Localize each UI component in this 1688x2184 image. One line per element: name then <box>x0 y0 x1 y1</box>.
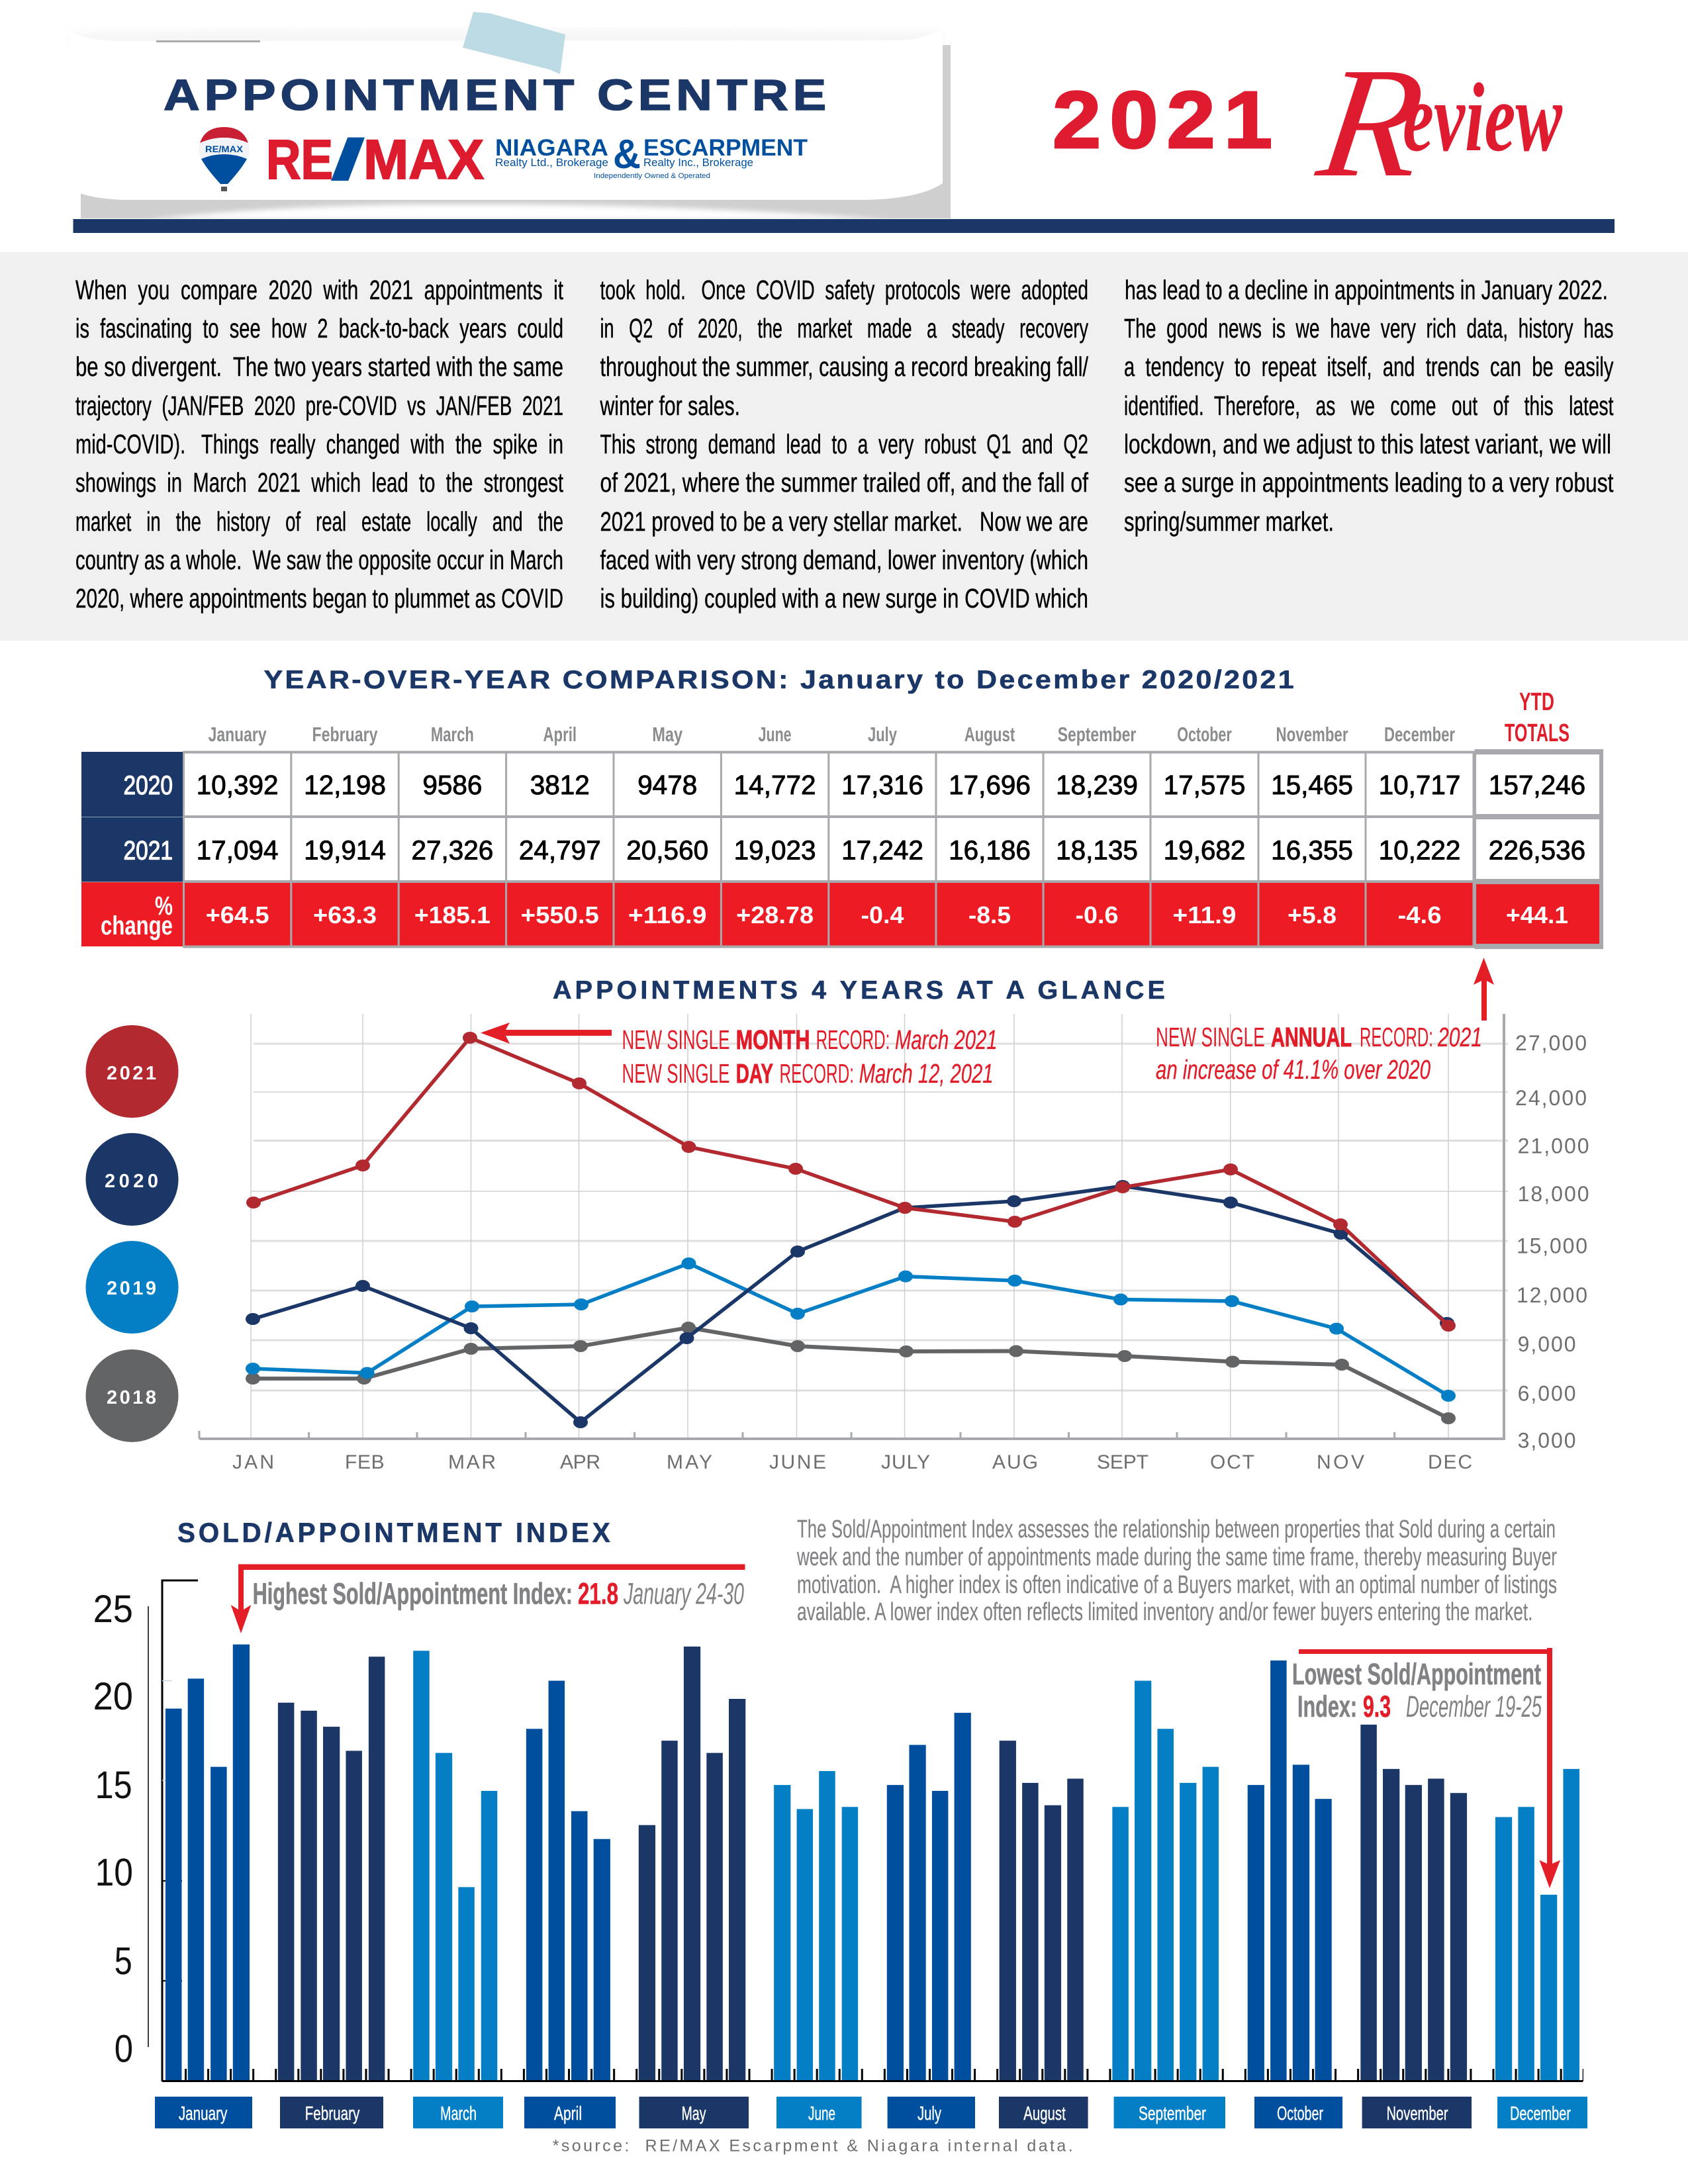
chart grid <box>251 1014 1508 1437</box>
text column 1: 2020, where appointments began to plummet as COVID <box>75 583 563 614</box>
row: 2021 values: 18,135 <box>1056 835 1138 866</box>
callout: annual record: an increase of 41.1% over 2020 <box>1156 1054 1430 1085</box>
text column 1: be so divergent. The two years started with the same <box>75 351 563 382</box>
month headers: May <box>652 723 683 746</box>
row: 2020 values: 14,772 <box>734 770 816 800</box>
row: 2020 values: 17,696 <box>949 770 1031 800</box>
row: 2021 values: 19,682 <box>1164 835 1245 866</box>
row labels: 2021 <box>123 837 173 866</box>
row: 2020 values: 9478 <box>637 770 697 800</box>
paper card <box>70 28 943 200</box>
label: August <box>999 2097 1088 2128</box>
text column 1 <box>75 275 563 614</box>
panel: intro text <box>0 252 1688 641</box>
bars: February <box>278 1657 385 2081</box>
red row <box>184 882 1475 946</box>
row label backgrounds <box>81 752 184 817</box>
legend 2018 <box>86 1349 179 1442</box>
row: 2021 values: 19,914 <box>304 835 386 866</box>
logo wordmark: RE/MAX: MAX <box>363 128 484 191</box>
row: percent change: -8.5 <box>968 901 1011 929</box>
text column 2: is building) coupled with a new surge in COVID which <box>600 583 1088 614</box>
legend 2021 <box>86 1025 179 1118</box>
callout: lowest index: Index: <box>1297 1690 1357 1723</box>
row: 2020 values: 10,717 <box>1379 770 1460 800</box>
label: June: June <box>808 2103 835 2124</box>
row: 2021 values: 20,560 <box>626 835 708 866</box>
callout: single month and day records: DAY <box>736 1058 773 1089</box>
heading: 2021 Review <box>1053 35 1563 210</box>
row: 2021 values: 10,222 <box>1379 835 1460 866</box>
row: percent change: +185.1 <box>414 901 491 929</box>
label: January <box>155 2097 252 2128</box>
y axis labels: 18,000 <box>1518 1182 1589 1206</box>
x axis labels: FEB <box>345 1451 385 1473</box>
text column 2: took hold. Once COVID safety protocols were adopted <box>600 275 1088 305</box>
icon: balloon logo: RE/MAX <box>205 144 244 154</box>
tape <box>463 12 565 74</box>
label: May <box>639 2097 749 2128</box>
row: 2021 values: 17,242 <box>841 835 923 866</box>
logo wordmark: RE/MAX: RE <box>266 128 333 191</box>
callout: single month and day records: NEW SINGLE <box>622 1058 729 1089</box>
x axis labels: MAR <box>448 1451 496 1473</box>
label: February: February <box>305 2103 360 2124</box>
bar chart: sold/appointment index <box>93 1580 1583 2081</box>
callout: lowest index: Lowest Sold/Appointment <box>1292 1657 1541 1691</box>
callout: lowest index: December 19-25 <box>1406 1690 1542 1723</box>
month headers: March <box>431 723 474 746</box>
series 2021 <box>246 1032 1456 1332</box>
label: November: November <box>1386 2103 1448 2124</box>
x axis labels: DEC <box>1428 1451 1472 1473</box>
callout: single month and day records: March 2021 <box>895 1024 998 1055</box>
text column 1: trajectory (JAN/FEB 2020 pre-COVID vs JAN/FEB 2021 <box>75 390 563 421</box>
y axis labels: 21,000 <box>1518 1134 1589 1158</box>
text column 1: country as a whole. We saw the opposite occur in March <box>75 545 563 575</box>
label: June <box>776 2097 862 2128</box>
callout: highest index: Highest Sold/Appointment Index: <box>253 1576 573 1611</box>
label: December <box>1497 2097 1587 2128</box>
month headers: June <box>759 723 792 746</box>
logo: brokerage names: NIAGARA <box>495 135 608 161</box>
month headers: December <box>1384 723 1455 746</box>
YTD box <box>1475 749 1603 949</box>
heading: year-over-year comparison: YEAR-OVER-YEAR COMPARISON: January to December 2020/2021 <box>263 666 1296 694</box>
text column 1: market in the history of real estate locally and the <box>75 506 563 537</box>
row: percent change: +64.5 <box>206 901 269 929</box>
callout: single month and day records: MONTH <box>736 1024 810 1055</box>
y axis labels: 3,000 <box>1518 1428 1576 1452</box>
heading: 2021 Review: eview <box>1403 64 1563 172</box>
month headers <box>209 723 1455 746</box>
y axis labels: 12,000 <box>1517 1283 1587 1307</box>
text column 2: in Q2 of 2020, the market made a steady recovery <box>600 313 1088 343</box>
title: appointment centre: APPOINTMENT CENTRE <box>164 70 831 119</box>
heading: appointments 4 years at a glance: APPOINTMENTS 4 YEARS AT A GLANCE <box>553 976 1168 1005</box>
label: November <box>1362 2097 1472 2128</box>
bars: December <box>1495 1769 1579 2081</box>
text column 1: When you compare 2020 with 2021 appointments it <box>75 275 563 305</box>
row: 2021 values: 24,797 <box>519 835 601 866</box>
row: 2020 values: 12,198 <box>304 770 386 800</box>
month headers: November <box>1276 723 1348 746</box>
label: July: July <box>917 2103 941 2124</box>
x axis labels: JULY <box>881 1451 930 1473</box>
legend 2018: 2018 <box>107 1387 156 1408</box>
callout: single month and day records: March 12, 2021 <box>859 1058 993 1089</box>
bars right half <box>887 1661 1579 2081</box>
YTD totals heading: TOTALS <box>1505 719 1570 747</box>
row: 2020 values: 18,239 <box>1056 770 1138 800</box>
legend 2021: 2021 <box>107 1063 156 1084</box>
bar chart y axis: 5 <box>115 1940 132 1983</box>
text column 3 <box>1124 275 1614 537</box>
bar chart x axis <box>162 2075 1583 2081</box>
row: percent change: +11.9 <box>1173 901 1237 929</box>
text column 2: of 2021, where the summer trailed off, and the fall of <box>600 467 1088 498</box>
label: May: May <box>682 2103 706 2124</box>
label: September <box>1114 2097 1225 2128</box>
text column 2: faced with very strong demand, lower inventory (which <box>600 545 1088 575</box>
text column 1: showings in March 2021 which lead to the strongest <box>75 467 563 498</box>
bar chart y axis: 25 <box>93 1588 133 1631</box>
text block: index description <box>796 1516 1557 1626</box>
row: percent change: +5.8 <box>1288 901 1336 929</box>
logo: brokerage names: ESCARPMENT <box>643 135 808 161</box>
bar chart y axis <box>93 1580 198 2081</box>
logo: brokerage names: Independently Owned & Operated <box>594 172 710 180</box>
row: 2021 values: 16,186 <box>949 835 1031 866</box>
logo: brokerage names: Realty Ltd., Brokerage <box>495 156 608 169</box>
row: 2021 values: 27,326 <box>411 835 493 866</box>
bar chart y axis: 15 <box>95 1764 132 1807</box>
label: February <box>280 2097 383 2128</box>
row labels <box>101 771 173 940</box>
row: 2020 values <box>197 770 1585 800</box>
label: January: January <box>179 2103 228 2124</box>
callout: annual record <box>1156 1022 1482 1085</box>
legend 2020 <box>86 1133 179 1226</box>
row: 2020 values: 157,246 <box>1489 770 1585 800</box>
x axis labels: JAN <box>232 1451 274 1473</box>
x axis labels: JUNE <box>769 1451 826 1473</box>
x axis labels: NOV <box>1317 1451 1364 1473</box>
callout: single month and day records <box>622 1024 998 1089</box>
month headers: September <box>1058 723 1136 746</box>
label: March: March <box>440 2103 477 2124</box>
row: percent change: -4.6 <box>1398 901 1442 929</box>
row: percent change: +44.1 <box>1506 901 1568 929</box>
callout: annual record: 2021 <box>1437 1022 1482 1052</box>
callout: single month and day records: RECORD: <box>816 1024 890 1055</box>
row: 2021 values: 226,536 <box>1489 835 1585 866</box>
text column 2: throughout the summer, causing a record breaking fall/ <box>600 351 1088 382</box>
bar chart y axis: 10 <box>95 1851 133 1894</box>
logo wordmark: RE/MAX: / <box>332 128 363 191</box>
source note: *source: RE/MAX Escarpment & Niagara internal data. <box>553 2136 1073 2155</box>
series 2020 <box>246 1180 1454 1428</box>
text column 2 <box>600 275 1088 614</box>
legend 2019: 2019 <box>107 1278 156 1299</box>
y axis labels: 15,000 <box>1517 1234 1587 1258</box>
callout: highest index: 21.8 <box>578 1576 618 1611</box>
row: 2021 values <box>197 835 1585 866</box>
label: April <box>524 2097 616 2128</box>
bars: January <box>165 1645 250 2081</box>
header: torn paper card with logo <box>70 12 951 220</box>
row labels: change <box>101 911 173 940</box>
callout: annual record: ANNUAL <box>1271 1022 1352 1052</box>
logo: brokerage names <box>495 132 808 180</box>
table: year over year <box>81 688 1603 949</box>
line chart: appointments <box>199 1014 1589 1473</box>
row: 2021 values: 16,355 <box>1271 835 1353 866</box>
bars: October <box>1248 1661 1332 2081</box>
month labels <box>155 2097 1587 2128</box>
text column 2: This strong demand lead to a very robust Q1 and Q2 <box>600 429 1088 459</box>
month headers: April <box>543 723 577 746</box>
row: 2020 values: 10,392 <box>197 770 279 800</box>
text column 2: winter for sales. <box>600 390 740 421</box>
label: October: October <box>1277 2103 1323 2124</box>
row: 2020 values: 15,465 <box>1271 770 1353 800</box>
bars: May <box>639 1647 745 2081</box>
x axis labels: APR <box>560 1451 600 1473</box>
bar chart y axis: 0 <box>115 2027 133 2070</box>
bars: July <box>887 1713 971 2081</box>
row: 2020 values: 17,575 <box>1164 770 1245 800</box>
text column 2: 2021 proved to be a very stellar market. Now we are <box>600 506 1088 537</box>
table grid <box>183 751 1474 948</box>
heading: 2021 Review: R <box>1309 35 1434 210</box>
label: July <box>888 2097 975 2128</box>
label: December: December <box>1510 2103 1571 2124</box>
label: September: September <box>1139 2103 1206 2124</box>
y axis labels: 24,000 <box>1515 1086 1587 1110</box>
month headers: July <box>868 723 898 746</box>
callout: single month and day records: NEW SINGLE <box>622 1024 729 1055</box>
row: percent change: +63.3 <box>313 901 377 929</box>
row: percent change: -0.4 <box>861 901 904 929</box>
logo: brokerage names: Realty Inc., Brokerage <box>643 156 753 169</box>
row: percent change: +116.9 <box>628 901 707 929</box>
row: 2021 values: 17,094 <box>197 835 279 866</box>
heading: 2021 Review: 2021 <box>1053 75 1281 165</box>
row: percent change: -0.6 <box>1075 901 1119 929</box>
callout: lowest index <box>1292 1648 1560 1888</box>
x axis labels <box>232 1451 1472 1473</box>
label: August: August <box>1023 2103 1066 2124</box>
YTD totals heading: YTD <box>1519 688 1554 716</box>
month headers: October <box>1177 723 1232 746</box>
row: 2021 values: 19,023 <box>734 835 816 866</box>
series 2018 <box>246 1322 1456 1424</box>
x axis labels: MAY <box>667 1451 712 1473</box>
row: percent change: +550.5 <box>521 901 599 929</box>
text column 3: spring/summer market. <box>1124 506 1334 537</box>
bars left half <box>165 1645 858 2081</box>
x axis labels: OCT <box>1210 1451 1254 1473</box>
y axis labels: 27,000 <box>1515 1031 1587 1055</box>
callout: annual record: RECORD: <box>1360 1022 1433 1052</box>
row labels: % <box>155 891 173 921</box>
series 2019 <box>246 1257 1456 1402</box>
legend 2020: 2020 <box>105 1171 158 1192</box>
heading: sold/appointment index: SOLD/APPOINTMENT INDEX <box>177 1517 613 1548</box>
y axis labels: 6,000 <box>1518 1382 1576 1406</box>
callout: annual record: NEW SINGLE <box>1156 1022 1265 1052</box>
chart axes <box>199 1014 1505 1440</box>
label: October <box>1254 2097 1342 2128</box>
arrow: highest index bracket <box>231 1565 745 1633</box>
row: 2020 values: 9586 <box>422 770 482 800</box>
row: 2020 values: 3812 <box>530 770 590 800</box>
logo: brokerage names: & <box>613 132 641 177</box>
text column 1: mid-COVID). Things really changed with the spike in <box>75 429 563 459</box>
arrow: to March 2021 peak <box>481 1023 612 1044</box>
y axis labels <box>1515 1031 1589 1452</box>
bars: August <box>1000 1741 1084 2081</box>
YTD totals heading <box>1505 688 1570 747</box>
x axis labels: AUG <box>992 1451 1038 1473</box>
bars: June <box>774 1771 858 2081</box>
label: April: April <box>554 2103 582 2124</box>
bars: September <box>1112 1681 1219 2081</box>
bars: April <box>526 1681 610 2081</box>
month headers: January <box>209 723 267 746</box>
x axis labels: SEPT <box>1097 1451 1149 1473</box>
callout: highest index <box>231 1565 745 1633</box>
arrow: up to YTD totals <box>1474 958 1494 1021</box>
bars: November <box>1360 1725 1467 2081</box>
label: March <box>413 2097 503 2128</box>
month headers: August <box>964 723 1015 746</box>
arrow: lowest index bracket <box>1299 1648 1560 1888</box>
bars: March <box>413 1651 497 2081</box>
row: 2020 values: 17,316 <box>841 770 923 800</box>
legend: year circles <box>86 1025 179 1442</box>
text column 1: is fascinating to see how 2 back-to-back years could <box>75 313 563 343</box>
callout: lowest index: 9.3 <box>1363 1690 1391 1723</box>
navy header bar <box>73 219 1615 233</box>
row: percent change: +28.78 <box>736 901 814 929</box>
callout: highest index: January 24-30 <box>623 1576 744 1611</box>
logo wordmark: RE/MAX <box>266 128 484 191</box>
month headers: February <box>312 723 378 746</box>
icon: balloon logo <box>199 127 250 191</box>
y axis labels: 9,000 <box>1518 1332 1576 1356</box>
legend 2019 <box>86 1241 179 1334</box>
callout: single month and day records: RECORD: <box>780 1058 854 1089</box>
row labels: 2020 <box>123 771 173 800</box>
bar chart y axis: 20 <box>93 1675 133 1718</box>
row: percent change <box>206 901 1568 929</box>
